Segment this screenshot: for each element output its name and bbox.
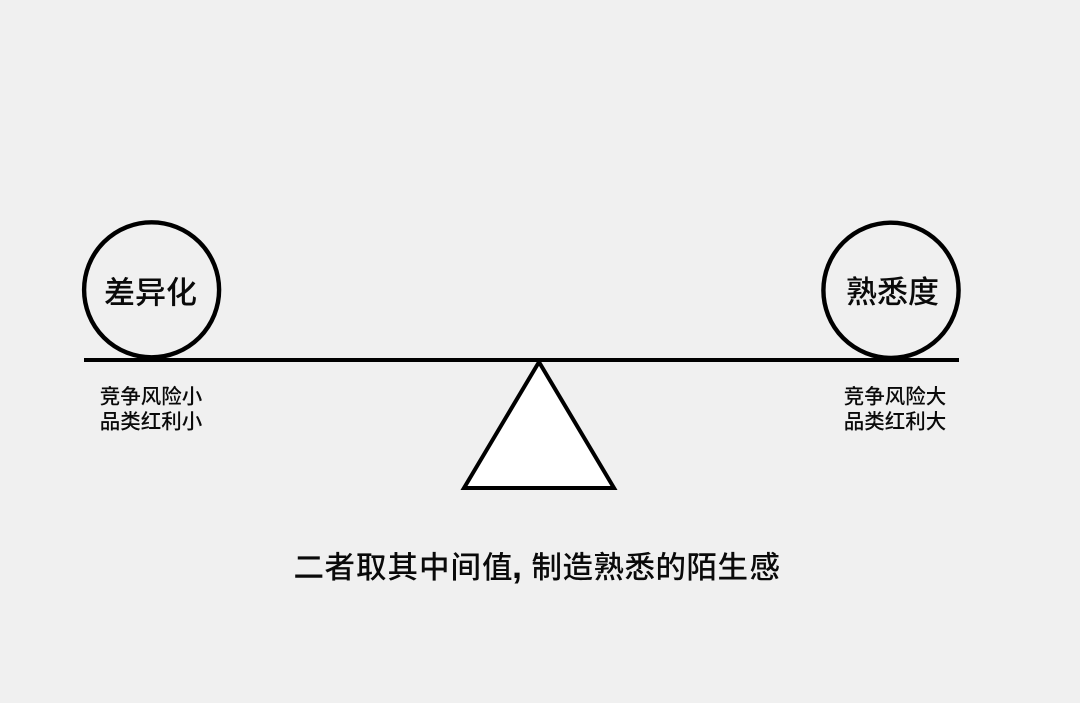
- fulcrum triangle: [464, 362, 614, 488]
- right circle: familiarity: 熟悉度: [846, 275, 939, 310]
- right circle: familiarity: [823, 223, 959, 358]
- left circle: differentiation: [84, 222, 219, 357]
- bottom conclusion: 二者取其中间值, 制造熟悉的陌生感: [294, 545, 780, 586]
- left circle: differentiation: 差异化: [104, 276, 197, 310]
- seesaw beam: [84, 358, 959, 362]
- left caption: 品类红利小: [100, 410, 203, 434]
- left caption: 竞争风险小: [100, 386, 203, 408]
- right caption: 品类红利大: [844, 410, 946, 434]
- left caption: [100, 386, 203, 434]
- seesaw diagram: [84, 222, 959, 488]
- right caption: 竞争风险大: [844, 386, 946, 408]
- right caption: [844, 386, 946, 434]
